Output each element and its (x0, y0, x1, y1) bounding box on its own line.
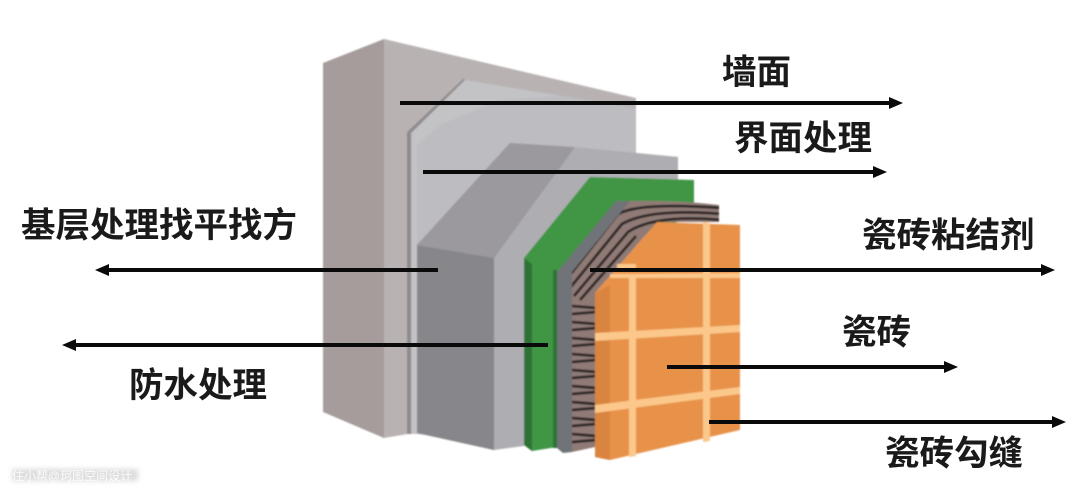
layer: base levelling (417, 143, 678, 450)
arrow: tile (667, 361, 958, 373)
layer: waterproofing (524, 177, 694, 451)
arrow: wall (400, 97, 903, 109)
layer: tile adhesive (557, 201, 722, 453)
layer: interface treatment (411, 80, 636, 445)
layered wall illustration (323, 39, 740, 460)
arrow: interface treatment (423, 166, 887, 178)
label: waterproofing: 防水处理 (129, 367, 267, 405)
label: tile grout: 瓷砖勾缝 (885, 435, 1023, 473)
arrow: tile grout (709, 416, 1066, 428)
layer: tiles (595, 222, 740, 460)
watermark: 住小帮@珂图空间设计 (12, 469, 132, 483)
label: base levelling: 基层处理找平找方 (21, 207, 297, 245)
layer: wall (323, 39, 636, 438)
label: wall: 墙面 (722, 54, 791, 92)
arrow: tile adhesive (590, 264, 1055, 276)
tile grout (595, 222, 740, 457)
label: tile adhesive: 瓷砖粘结剂 (862, 217, 1034, 255)
arrow: base levelling (95, 264, 438, 276)
label: tile: 瓷砖 (842, 314, 911, 352)
label: interface treatment: 界面处理 (734, 120, 872, 158)
arrow: waterproofing (62, 339, 548, 351)
